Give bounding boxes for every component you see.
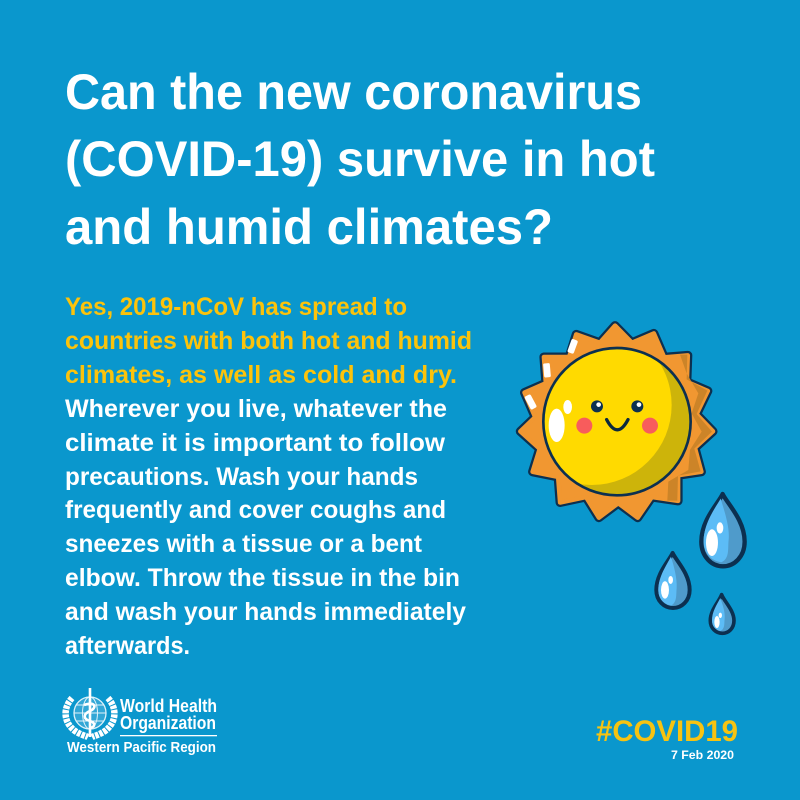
precautions advice (65, 395, 466, 660)
body text (65, 293, 472, 660)
organization name: World Health (120, 696, 217, 716)
precautions advice: and wash your hands immediately (65, 598, 466, 626)
highlighted answer: climates, as well as cold and dry. (65, 361, 457, 389)
date: 7 Feb 2020 (671, 748, 734, 762)
WHO logo (66, 688, 217, 756)
large drop (701, 494, 745, 566)
highlighted answer (65, 293, 472, 389)
icon: WHO emblem (66, 688, 114, 737)
precautions advice: elbow. Throw the tissue in the bin (65, 564, 460, 592)
icon: smiling sun (512, 325, 713, 518)
title (65, 64, 655, 255)
organization name (67, 696, 217, 756)
highlighted answer: Yes, 2019-nCoV has spread to (65, 293, 407, 321)
highlighted answer: countries with both hot and humid (65, 327, 472, 355)
precautions advice: precautions. Wash your hands (65, 463, 418, 491)
organization name: Western Pacific Region (67, 739, 216, 756)
precautions advice: climate it is important to follow (65, 429, 446, 457)
precautions advice: sneezes with a tissue or a bent (65, 530, 423, 558)
title: (COVID-19) survive in hot (65, 131, 655, 187)
precautions advice: afterwards. (65, 632, 190, 660)
hashtag: #COVID19 (596, 715, 738, 748)
organization name: Organization (120, 713, 216, 733)
small drop (710, 595, 734, 633)
medium drop (656, 553, 690, 608)
precautions advice: frequently and cover coughs and (65, 496, 446, 524)
icon: water drops (656, 494, 745, 633)
title: Can the new coronavirus (65, 64, 642, 120)
precautions advice: Wherever you live, whatever the (65, 395, 447, 423)
title: and humid climates? (65, 199, 553, 255)
